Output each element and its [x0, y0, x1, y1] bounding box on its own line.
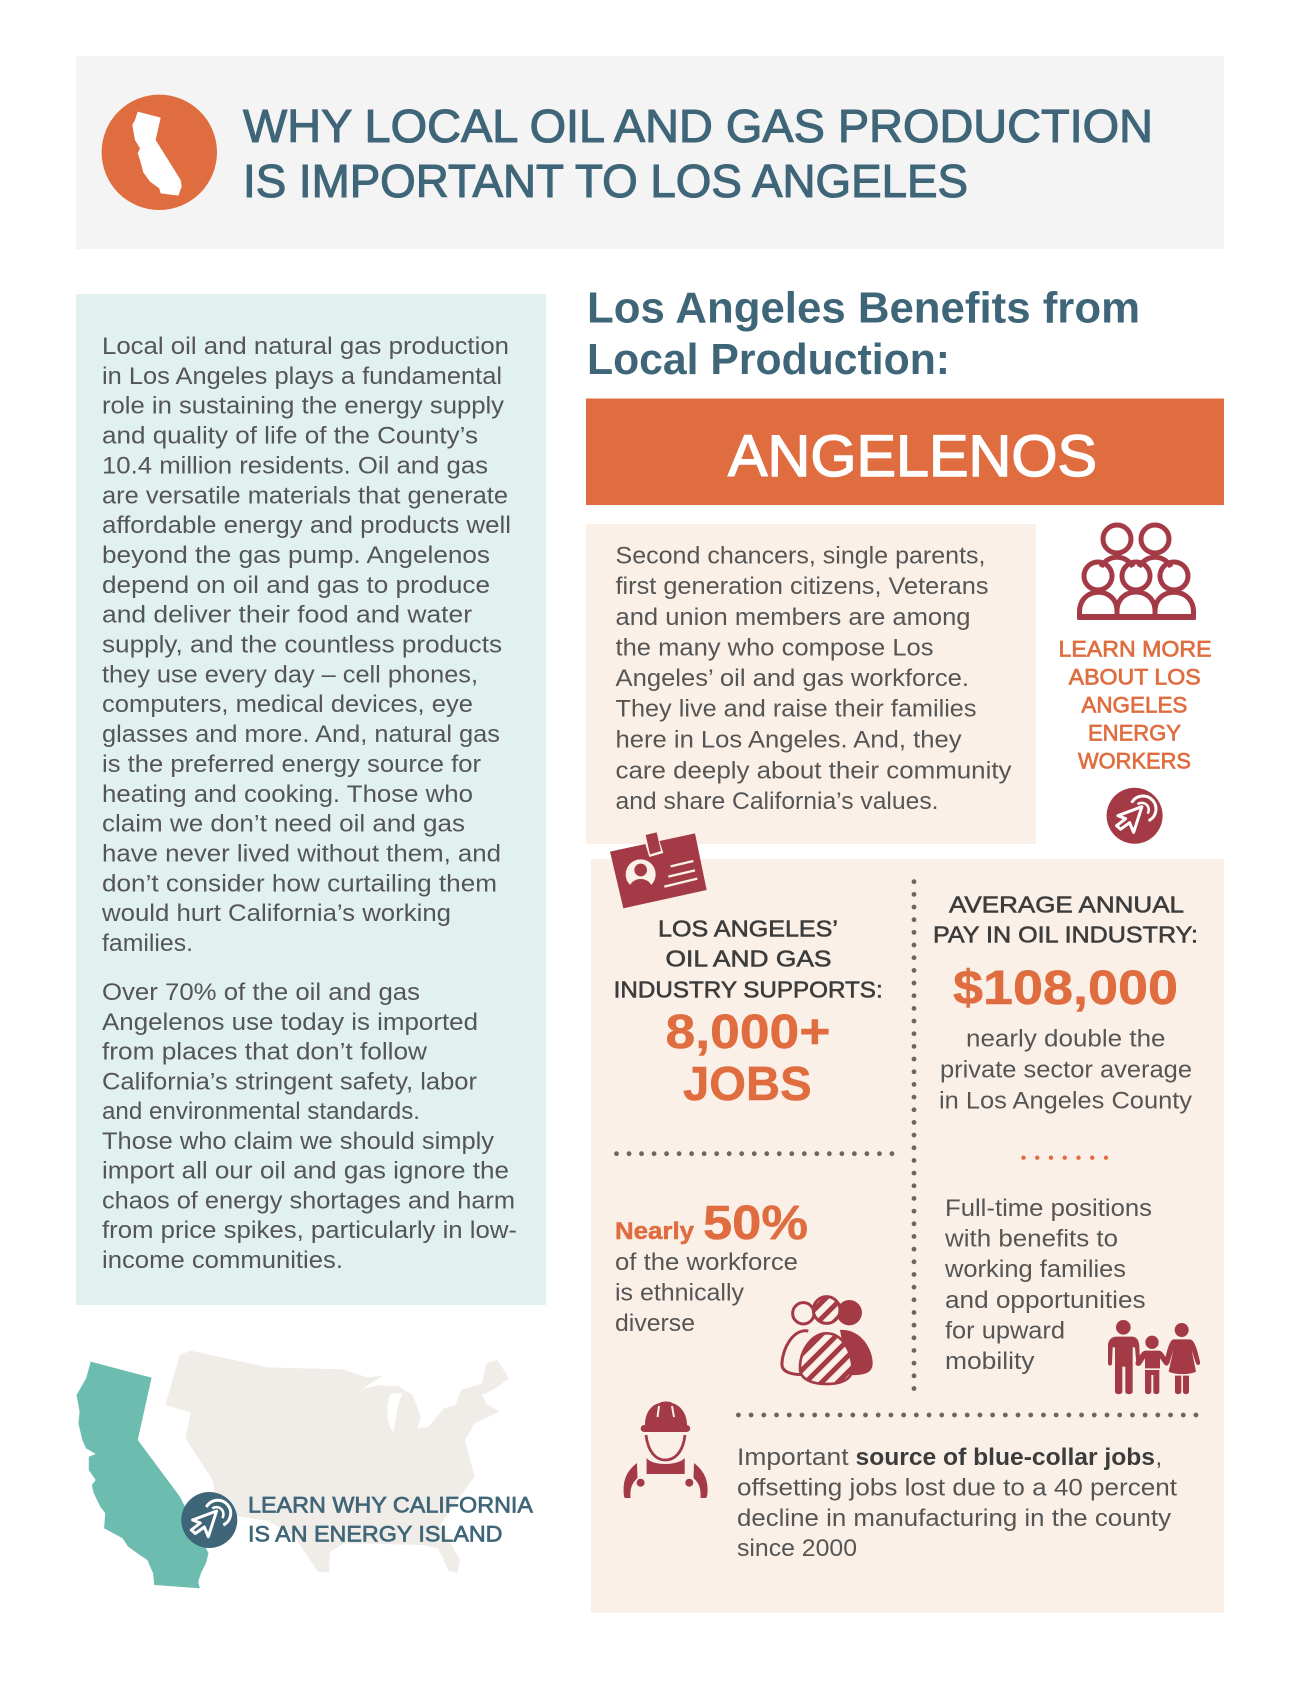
- icon: diverse people: [782, 1297, 873, 1384]
- stat: nearly 50% diverse workforce: [615, 1197, 808, 1337]
- text block: first paragraph: supply, and the countless products: [102, 632, 502, 658]
- heading: Los Angeles benefits: [587, 284, 1140, 384]
- header panel: [76, 56, 1224, 249]
- text block: second paragraph: income communities.: [102, 1247, 343, 1274]
- link: learn more about energy workers: ABOUT LOS: [1069, 665, 1201, 690]
- map: continental US: [165, 1351, 509, 1573]
- text block: full-time positions: [944, 1195, 1152, 1375]
- panel: workforce description: [586, 524, 1036, 844]
- stat: 8,000+ jobs: JOBS: [683, 1058, 812, 1111]
- text block: second paragraph: from places that don’t follow: [102, 1038, 428, 1066]
- text block: first paragraph: 10.4 million residents. Oil and gas: [102, 452, 488, 479]
- panel: workforce description: the many who compose Los: [616, 635, 934, 662]
- text block: second paragraph: [102, 979, 517, 1274]
- text block: first paragraph: role in sustaining the energy supply: [102, 393, 504, 420]
- stat: 8,000+ jobs: OIL AND GAS: [666, 946, 832, 972]
- icon: group of people: [1077, 525, 1196, 620]
- text block: second paragraph: chaos of energy shortages and harm: [102, 1187, 515, 1214]
- stat: nearly 50% diverse workforce: diverse: [615, 1310, 695, 1337]
- panel: workforce description: Second chancers, single parents,: [616, 542, 986, 569]
- banner: Angelenos: [586, 398, 1224, 505]
- text block: first paragraph: in Los Angeles plays a fundamental: [102, 363, 502, 390]
- text block: blue-collar jobs: decline in manufacturing in the county: [737, 1505, 1171, 1532]
- text block: second paragraph: Those who claim we should simply: [102, 1128, 494, 1155]
- text block: full-time positions: with benefits to: [944, 1226, 1118, 1253]
- stat: 8,000+ jobs: LOS ANGELES’: [658, 916, 838, 942]
- text block: blue-collar jobs: Important: [737, 1444, 849, 1471]
- text block: first paragraph: they use every day – cell phones,: [102, 661, 478, 688]
- text block: first paragraph: beyond the gas pump. Angelenos: [102, 542, 490, 569]
- title: [243, 100, 1153, 207]
- text block: blue-collar jobs: source of blue-collar jobs: [856, 1444, 1155, 1471]
- text block: first paragraph: are versatile materials that generate: [102, 482, 508, 509]
- link: learn more about energy workers: WORKERS: [1078, 749, 1191, 774]
- stat: average annual pay: $108,000: [953, 962, 1178, 1015]
- icon: family: [1108, 1320, 1200, 1394]
- panel: intro text: [76, 294, 546, 1305]
- text block: first paragraph: Local oil and natural gas production: [102, 333, 509, 360]
- link: learn more about energy workers: LEARN MORE: [1058, 637, 1212, 662]
- text block: first paragraph: and quality of life of the County’s: [102, 423, 478, 450]
- dotted dividers: [616, 882, 1197, 1415]
- stat: average annual pay: [933, 891, 1198, 1114]
- stat: 8,000+ jobs: 8,000+: [666, 1006, 830, 1059]
- icon: rocket link red: [1107, 788, 1163, 844]
- link: learn more about energy workers: ANGELES: [1081, 693, 1187, 718]
- link: learn more about energy workers: ENERGY: [1088, 721, 1181, 746]
- banner: Angelenos: ANGELENOS: [728, 424, 1097, 489]
- text block: full-time positions: for upward: [945, 1318, 1065, 1345]
- stat: 8,000+ jobs: [614, 916, 883, 1111]
- text block: first paragraph: computers, medical devices, eye: [102, 691, 473, 718]
- stat: nearly 50% diverse workforce: is ethnically: [615, 1280, 744, 1307]
- text block: first paragraph: is the preferred energy source for: [102, 751, 481, 778]
- text block: first paragraph: and deliver their food and water: [102, 602, 472, 629]
- text block: second paragraph: Angelenos use today is imported: [102, 1009, 478, 1036]
- text block: second paragraph: California’s stringent safety, labor: [102, 1068, 477, 1095]
- stat: nearly 50% diverse workforce: 50%: [703, 1197, 808, 1250]
- link: learn more about energy workers: [1058, 637, 1212, 774]
- text block: second paragraph: and environmental standards.: [102, 1098, 420, 1125]
- stat: average annual pay: AVERAGE ANNUAL: [949, 891, 1184, 917]
- text block: blue-collar jobs: offsetting jobs lost due to a 40 percent: [737, 1475, 1177, 1502]
- callout: learn why California is an energy island: LEARN WHY CALIFORNIA: [248, 1493, 533, 1518]
- title: WHY LOCAL OIL AND GAS PRODUCTION: [243, 100, 1153, 152]
- heading: Los Angeles benefits: Local Production:: [587, 335, 950, 384]
- map: United States with California separated: [77, 1351, 533, 1588]
- text block: first paragraph: have never lived without them, and: [102, 840, 501, 868]
- panel: workforce description: first generation citizens, Veterans: [616, 573, 988, 600]
- panel: workforce description: care deeply about their community: [616, 757, 1012, 784]
- icon: ID badge: [610, 832, 707, 908]
- panel: statistics: [591, 832, 1224, 1613]
- text block: second paragraph: from price spikes, particularly in low-: [102, 1217, 517, 1244]
- text block: second paragraph: import all our oil and gas ignore the: [102, 1158, 509, 1185]
- stat: 8,000+ jobs: INDUSTRY SUPPORTS:: [614, 976, 883, 1002]
- text block: first paragraph: depend on oil and gas to produce: [102, 572, 490, 599]
- text block: first paragraph: would hurt California’s working: [101, 900, 451, 927]
- text block: first paragraph: claim we don’t need oil and gas: [102, 811, 465, 838]
- text block: full-time positions: Full-time positions: [945, 1195, 1152, 1222]
- icon: construction worker: [624, 1402, 708, 1498]
- text block: first paragraph: glasses and more. And, natural gas: [102, 721, 500, 748]
- panel: workforce description: They live and raise their families: [616, 696, 976, 723]
- panel: workforce description: here in Los Angeles. And, they: [616, 726, 962, 753]
- stat: average annual pay: PAY IN OIL INDUSTRY:: [933, 922, 1198, 948]
- heading: Los Angeles benefits: Los Angeles Benefits from: [587, 284, 1140, 332]
- stat: average annual pay: nearly double the: [966, 1026, 1166, 1053]
- text block: blue-collar jobs: [737, 1444, 1177, 1562]
- text block: full-time positions: working families: [944, 1256, 1126, 1283]
- callout: learn why California is an energy island: [248, 1493, 533, 1547]
- text block: blue-collar jobs: ,: [1156, 1444, 1162, 1471]
- text block: blue-collar jobs: since 2000: [737, 1535, 857, 1562]
- panel: workforce description: and share California’s values.: [616, 788, 938, 815]
- stat: nearly 50% diverse workforce: of the workforce: [615, 1249, 798, 1276]
- text block: first paragraph: [101, 333, 511, 957]
- text block: first paragraph: don’t consider how curtailing them: [102, 870, 497, 897]
- stat: nearly 50% diverse workforce: Nearly: [615, 1218, 695, 1245]
- panel: workforce description: and union members are among: [616, 604, 970, 631]
- text block: full-time positions: and opportunities: [945, 1287, 1146, 1314]
- text block: second paragraph: Over 70% of the oil and gas: [102, 979, 420, 1006]
- icon: rocket link: [181, 1492, 237, 1548]
- icon: California in orange circle: [102, 95, 217, 210]
- text block: full-time positions: mobility: [945, 1348, 1034, 1375]
- panel: workforce description: Angeles’ oil and gas workforce.: [616, 665, 969, 692]
- callout: learn why California is an energy island: IS AN ENERGY ISLAND: [248, 1522, 502, 1547]
- map: California in teal: [77, 1362, 209, 1588]
- text block: first paragraph: families.: [102, 930, 193, 957]
- title: IS IMPORTANT TO LOS ANGELES: [243, 155, 968, 207]
- stat: average annual pay: private sector average: [940, 1056, 1192, 1083]
- text block: first paragraph: affordable energy and products well: [102, 512, 511, 539]
- text block: first paragraph: heating and cooking. Those who: [102, 781, 473, 808]
- stat: average annual pay: in Los Angeles County: [939, 1087, 1192, 1114]
